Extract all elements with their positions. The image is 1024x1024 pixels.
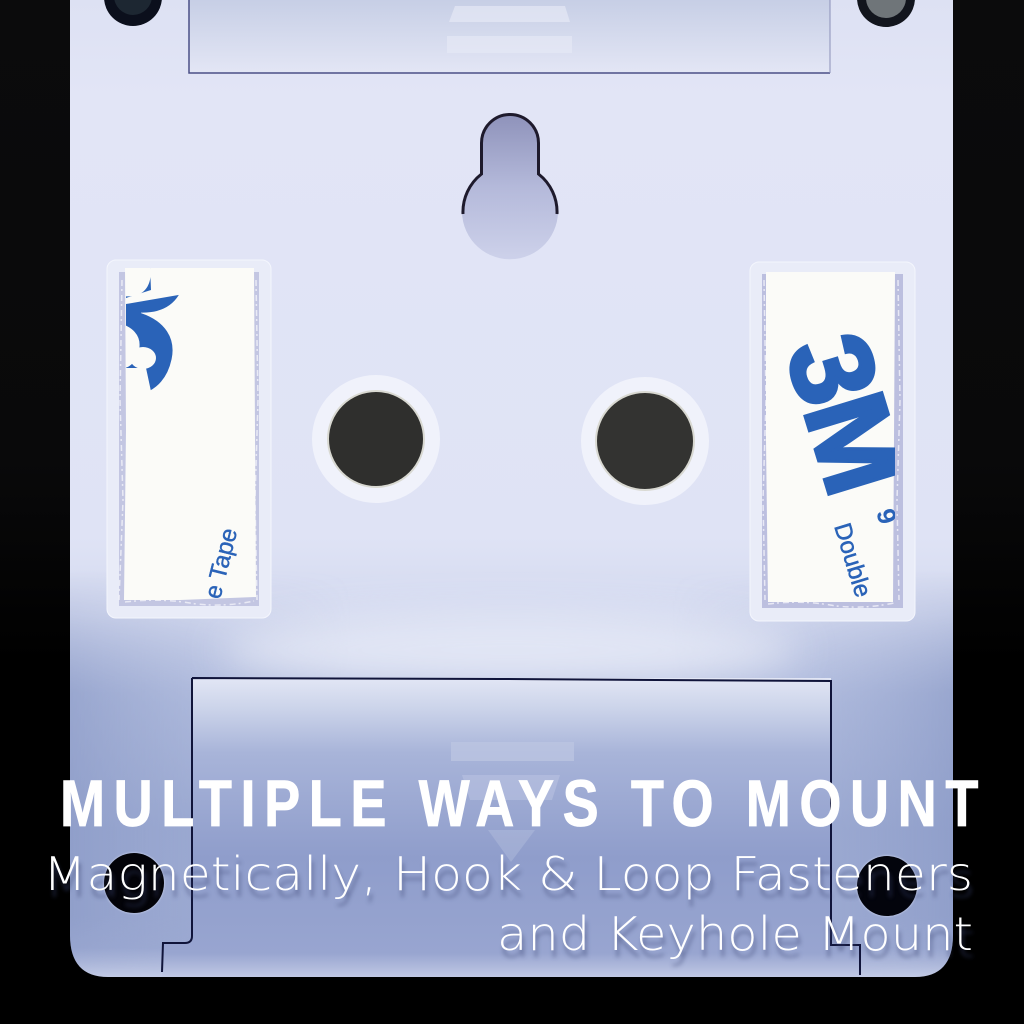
bottom battery door xyxy=(162,678,860,977)
tape print: Tape: e Tape xyxy=(200,525,243,601)
heading: MULTIPLE WAYS TO MOUNT xyxy=(60,766,979,840)
plate highlight xyxy=(220,616,800,684)
magnet: left xyxy=(312,375,440,503)
bottom door outline xyxy=(162,678,860,975)
panel: left adhesive tape xyxy=(106,260,272,618)
subheading shadow: Magnetically, Hook & Loop Fasteners xyxy=(45,854,975,908)
subheading line 2: and Keyhole Mount xyxy=(497,907,973,961)
hole: bottom right xyxy=(856,855,918,917)
screw: top right xyxy=(857,0,915,27)
top door arrow mark xyxy=(447,6,572,53)
magnet: right xyxy=(581,377,709,505)
subheading text xyxy=(43,847,975,968)
tape logo fragment xyxy=(126,268,179,390)
top battery door xyxy=(189,0,830,73)
keyhole mount xyxy=(462,114,558,259)
subheading shadow xyxy=(45,854,975,968)
3M logo: 3M xyxy=(761,319,931,506)
bottom door arrow mark xyxy=(451,742,574,862)
subheading shadow: and Keyhole Mount xyxy=(499,914,975,968)
tape logo fragment: 3 xyxy=(29,166,216,456)
tape print: Double: Double xyxy=(828,520,876,600)
plate side shading xyxy=(70,570,953,977)
tape print fragment: 9 xyxy=(870,505,903,528)
panel: right adhesive tape xyxy=(750,262,931,621)
screw: top left xyxy=(104,0,162,26)
subheading line 1: Magnetically, Hook & Loop Fasteners xyxy=(43,847,973,901)
hole: bottom left xyxy=(103,852,165,914)
